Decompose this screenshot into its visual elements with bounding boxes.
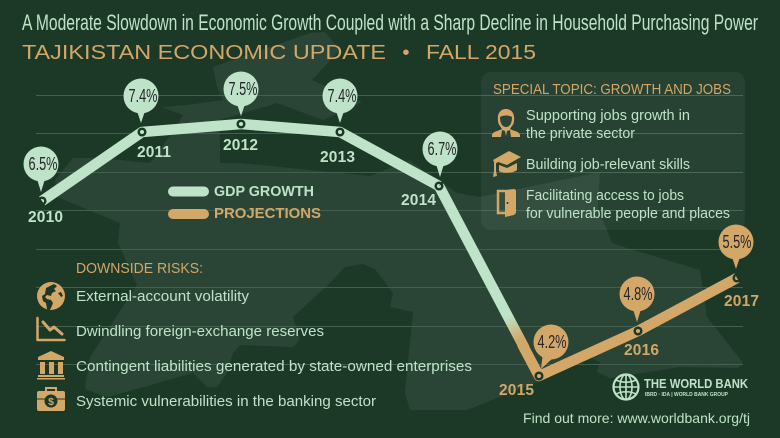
text: risk 2: Dwindling foreign-exchange reserves bbox=[76, 323, 324, 340]
GDP growth line bbox=[42, 124, 439, 201]
text: building skills: Building job-relevant skills bbox=[526, 156, 690, 173]
text: facilitating access: Facilitating access to jobs bbox=[526, 187, 684, 204]
year labels: 2015 bbox=[499, 382, 534, 399]
bubble: 2015: 4.2% bbox=[538, 332, 566, 352]
bubble: 2012 bbox=[224, 72, 258, 116]
icon: graduation cap bbox=[493, 151, 521, 177]
subtitle bbox=[22, 41, 536, 64]
bubble: 2015 bbox=[534, 324, 568, 369]
subtitle: TAJIKISTAN ECONOMIC UPDATE bbox=[22, 41, 386, 64]
bubble: 2016 bbox=[620, 276, 654, 322]
subtitle: • bbox=[402, 41, 410, 64]
bubble: 2013 bbox=[322, 78, 358, 123]
year labels: 2016 bbox=[624, 342, 659, 359]
year labels: 2012 bbox=[223, 137, 258, 154]
bubble: 2014 bbox=[422, 132, 458, 177]
bubble: 2014: 6.7% bbox=[428, 139, 456, 159]
icon: briefcase bbox=[37, 388, 65, 411]
text: facilitating access: for vulnerable people and places bbox=[526, 205, 730, 222]
icon: door bbox=[498, 189, 516, 217]
bubble: 2013: 7.4% bbox=[328, 86, 356, 106]
icon: person bbox=[492, 109, 520, 137]
subtitle: FALL 2015 bbox=[426, 41, 536, 64]
year labels: 2013 bbox=[320, 149, 355, 166]
data point markers bbox=[39, 121, 740, 379]
year labels bbox=[28, 137, 759, 399]
bubble: 2011: 7.4% bbox=[128, 86, 158, 106]
text: risk 1: External-account volatility bbox=[76, 288, 250, 305]
logo: World Bank: IBRD · IDA | WORLD BANK GROUP bbox=[645, 392, 728, 398]
icon: briefcase: $ bbox=[48, 396, 54, 408]
icon: globe bbox=[37, 282, 65, 311]
panel heading: SPECIAL TOPIC: GROWTH AND JOBS bbox=[493, 81, 731, 98]
bubble: 2016: 4.8% bbox=[624, 284, 652, 304]
bubble: 2017: 5.5% bbox=[722, 232, 752, 252]
grid lines bbox=[36, 96, 743, 364]
text: risk 4: Systemic vulnerabilities in the banking sector bbox=[76, 393, 376, 410]
logo: World Bank bbox=[614, 374, 748, 400]
year labels: 2010 bbox=[28, 209, 63, 226]
text: facilitating access bbox=[526, 187, 730, 222]
bubble: 2011 bbox=[124, 78, 158, 123]
bubble: 2010 bbox=[24, 146, 58, 192]
text: supporting jobs: Supporting jobs growth in bbox=[526, 107, 690, 124]
bubble: 2010: 6.5% bbox=[28, 154, 58, 174]
year labels: 2017 bbox=[724, 293, 759, 310]
text: supporting jobs bbox=[526, 107, 690, 142]
text: risk 3: Contingent liabilities generated by state-owned enterprises bbox=[76, 358, 472, 375]
risks heading: DOWNSIDE RISKS: bbox=[76, 260, 203, 277]
text: supporting jobs: the private sector bbox=[526, 125, 635, 142]
transition and projections line bbox=[439, 186, 737, 376]
logo: World Bank: THE WORLD BANK bbox=[644, 377, 748, 391]
footer link: Find out more: www.worldbank.org/tj bbox=[523, 410, 750, 426]
map of Tajikistan bbox=[55, 32, 743, 410]
legend: GDP GROWTH bbox=[214, 184, 314, 200]
legend: PROJECTIONS bbox=[214, 206, 321, 222]
panel: special topic bbox=[481, 72, 745, 230]
icon: declining chart bbox=[38, 318, 64, 340]
year labels: 2011 bbox=[137, 144, 171, 161]
bubble: 2012: 7.5% bbox=[228, 79, 258, 99]
legend bbox=[168, 184, 321, 222]
bubble: 2017 bbox=[718, 224, 754, 269]
icon: bank building bbox=[37, 351, 65, 380]
year labels: 2014 bbox=[401, 192, 436, 209]
